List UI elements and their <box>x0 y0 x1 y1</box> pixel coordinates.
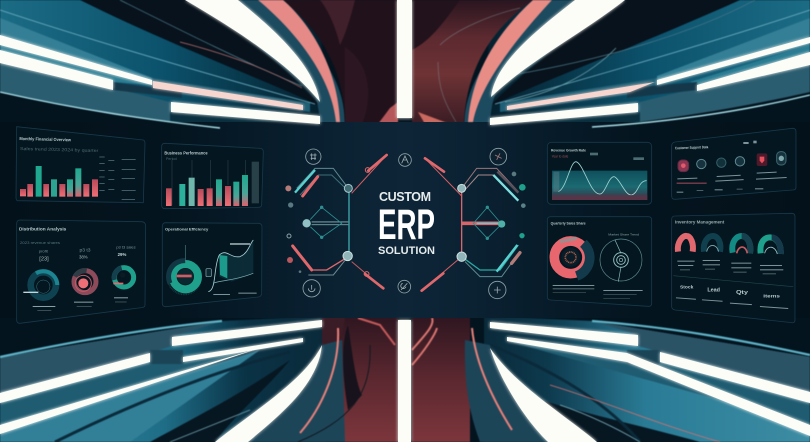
donut 3 <box>113 268 134 287</box>
gridlines and scale <box>172 160 259 205</box>
divider <box>673 276 793 287</box>
top right light structure <box>464 0 810 128</box>
panel heading: Distribution Analysis <box>19 227 67 233</box>
central dashboard wall <box>0 122 810 318</box>
pink donut <box>554 238 590 276</box>
chart caption: Market Share Trend <box>608 232 639 236</box>
donut legends <box>33 297 128 311</box>
panel subheading: Year to date <box>552 154 568 158</box>
panel heading: Operational Efficiency <box>165 227 209 232</box>
summary captions <box>676 297 788 309</box>
panel subheading: Sales trend 2023 2024 by quarter <box>20 146 99 153</box>
chart captions: profit <box>39 249 49 254</box>
panel heading: Customer Support Data <box>675 145 709 150</box>
donut panel: bottom left: 38% <box>79 254 88 259</box>
donut 1 <box>23 271 57 298</box>
title: custom: CUSTOM <box>379 190 431 204</box>
panel subheading: 2023 revenue shares <box>20 240 60 245</box>
small icon <box>206 269 211 277</box>
icon tiles <box>678 152 786 172</box>
left circuit <box>285 155 387 288</box>
line chart panel: top right <box>547 142 652 204</box>
bottom white light strips <box>0 320 810 442</box>
bottom right light structure <box>484 316 810 442</box>
gauge panel: bottom far right <box>672 213 795 323</box>
thin top accent lines <box>0 92 810 128</box>
summary values: Qty <box>736 290 749 296</box>
panel heading: Monthly Financial Overview <box>19 136 72 142</box>
bars <box>166 175 248 206</box>
title: solution: SOLUTION <box>378 245 435 257</box>
title: erp: ERP <box>378 201 435 249</box>
icon badges <box>303 148 507 299</box>
donut panel: bottom right <box>547 217 652 306</box>
donut panel: bottom left <box>17 220 146 323</box>
summary values: Stock <box>680 284 694 290</box>
panel heading: Revenue Growth Rate <box>551 147 587 152</box>
big donut <box>168 245 201 294</box>
top left light structure <box>0 0 345 128</box>
donut panel: bottom left: p3 t3 <box>79 248 91 254</box>
summary values: Lead <box>707 288 721 294</box>
gauge icon panel: top far right <box>672 128 796 199</box>
right circuit <box>422 158 526 291</box>
donut 2 <box>74 271 96 293</box>
top white light strips <box>0 0 810 125</box>
bottom thin accent lines <box>0 321 810 357</box>
donut panel: bottom left: [23] <box>39 257 49 263</box>
top centre metallic maroon column <box>283 0 533 124</box>
bottom left light structure <box>0 316 326 442</box>
radar ring chart <box>600 239 642 282</box>
donut panel: bottom left: 29% <box>118 252 126 257</box>
panel subheading: Period <box>166 157 177 161</box>
area chart <box>552 153 647 200</box>
donut and area panel: bottom centre left <box>162 223 262 307</box>
gauges <box>678 236 781 254</box>
side legend <box>99 157 136 200</box>
gauge captions <box>677 260 783 274</box>
panel heading: Business Performance <box>164 150 208 155</box>
legends <box>553 285 643 299</box>
centre logic diagram <box>285 148 526 299</box>
bar chart panel: top left <box>16 127 145 203</box>
area chart <box>208 240 257 295</box>
bars <box>20 166 98 197</box>
icon glyphs <box>308 153 502 293</box>
panel heading: Quarterly Sales Share <box>551 221 586 226</box>
tile captions <box>677 141 787 193</box>
summary values: Items <box>763 293 780 299</box>
bottom centre metallic maroon column <box>248 316 548 442</box>
bar chart panel: top centre left <box>162 143 263 209</box>
pink accent swooshes <box>258 0 552 122</box>
donut panel: bottom left: p3 t3 sales <box>116 245 136 250</box>
summary values <box>680 284 780 299</box>
panel heading: Inventory Management <box>675 219 725 224</box>
